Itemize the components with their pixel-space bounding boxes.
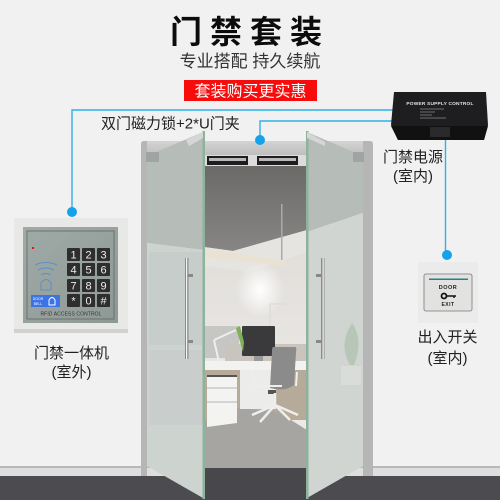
right door handle: [316, 258, 324, 359]
floor and baseboard: [0, 466, 500, 500]
keys: 1: [70, 250, 77, 262]
desk top: [204, 361, 307, 370]
label: exit button: [417, 329, 478, 367]
keys: [67, 248, 110, 308]
keypad caption: RFID ACCESS CONTROL: [40, 312, 102, 318]
brown floor behind desks: [204, 370, 307, 420]
keys: 9: [100, 280, 107, 292]
magnetic locks: [204, 155, 306, 166]
power supply box: POWER SUPPLY CONTROL: [406, 101, 474, 107]
keys: 7: [70, 280, 77, 292]
dark ceiling: [204, 166, 307, 251]
desk divider: [204, 326, 239, 358]
label: exit button: (室内): [428, 350, 468, 367]
red promo banner: 套装购买更实惠: [194, 82, 307, 100]
keys: 0: [85, 296, 92, 308]
white desk pedestal: [240, 370, 276, 409]
door bell button: [31, 295, 60, 307]
label: magnetic lock: 双门磁力锁+2*U门夹: [101, 116, 240, 132]
label: exit button: 出入开关: [417, 329, 478, 346]
exit button: DOOR: [439, 285, 457, 291]
wifi card symbol: [35, 262, 57, 290]
exit button: EXIT: [441, 302, 455, 308]
connector lines: [72, 110, 446, 255]
door: opening with office interior: [141, 141, 373, 500]
office wall: [204, 166, 307, 471]
keypad: [14, 218, 128, 333]
power supply box: [391, 92, 488, 140]
left hinge bracket: [146, 132, 203, 162]
ceiling lamp: [204, 249, 286, 266]
floor lamp: [270, 304, 286, 330]
label: keypad: [34, 345, 109, 381]
title: 门禁套装: [170, 14, 330, 50]
label: power supply: (室内): [393, 168, 433, 185]
power LED: [32, 247, 34, 249]
potted plant reflection: [341, 323, 361, 385]
right glass door leaf: [306, 131, 364, 499]
light ceiling band: [204, 230, 307, 272]
keys: #: [100, 296, 107, 308]
plant and desk lamp: [214, 326, 244, 362]
keys: 8: [85, 280, 92, 292]
label: keypad: 门禁一体机: [34, 345, 109, 362]
door frame: [141, 141, 373, 476]
door bell button: BELL: [34, 302, 42, 306]
keys: *: [71, 296, 76, 308]
red promo banner: [184, 80, 317, 101]
exit button: [418, 262, 478, 323]
subtitle: 专业搭配 持久续航: [180, 52, 320, 71]
left door handle: [185, 258, 193, 359]
office chair: [252, 347, 298, 422]
monitor: [242, 326, 275, 362]
keys: 2: [85, 250, 92, 262]
label: keypad: (室外): [52, 364, 92, 381]
key icon: [442, 294, 456, 298]
keys: 3: [100, 250, 107, 262]
carpet floor: [204, 408, 307, 468]
drawer unit: [207, 375, 237, 427]
keys: 4: [70, 264, 77, 276]
keys: 5: [85, 264, 92, 276]
label: power supply: [383, 149, 443, 185]
threshold shadow: [204, 468, 307, 500]
door bell button: DOOR: [33, 297, 44, 301]
connector dots: [67, 135, 452, 260]
right hinge bracket: [307, 132, 364, 162]
label: power supply: 门禁电源: [383, 149, 443, 166]
keys: 6: [100, 264, 107, 276]
left glass door leaf: [146, 131, 205, 499]
